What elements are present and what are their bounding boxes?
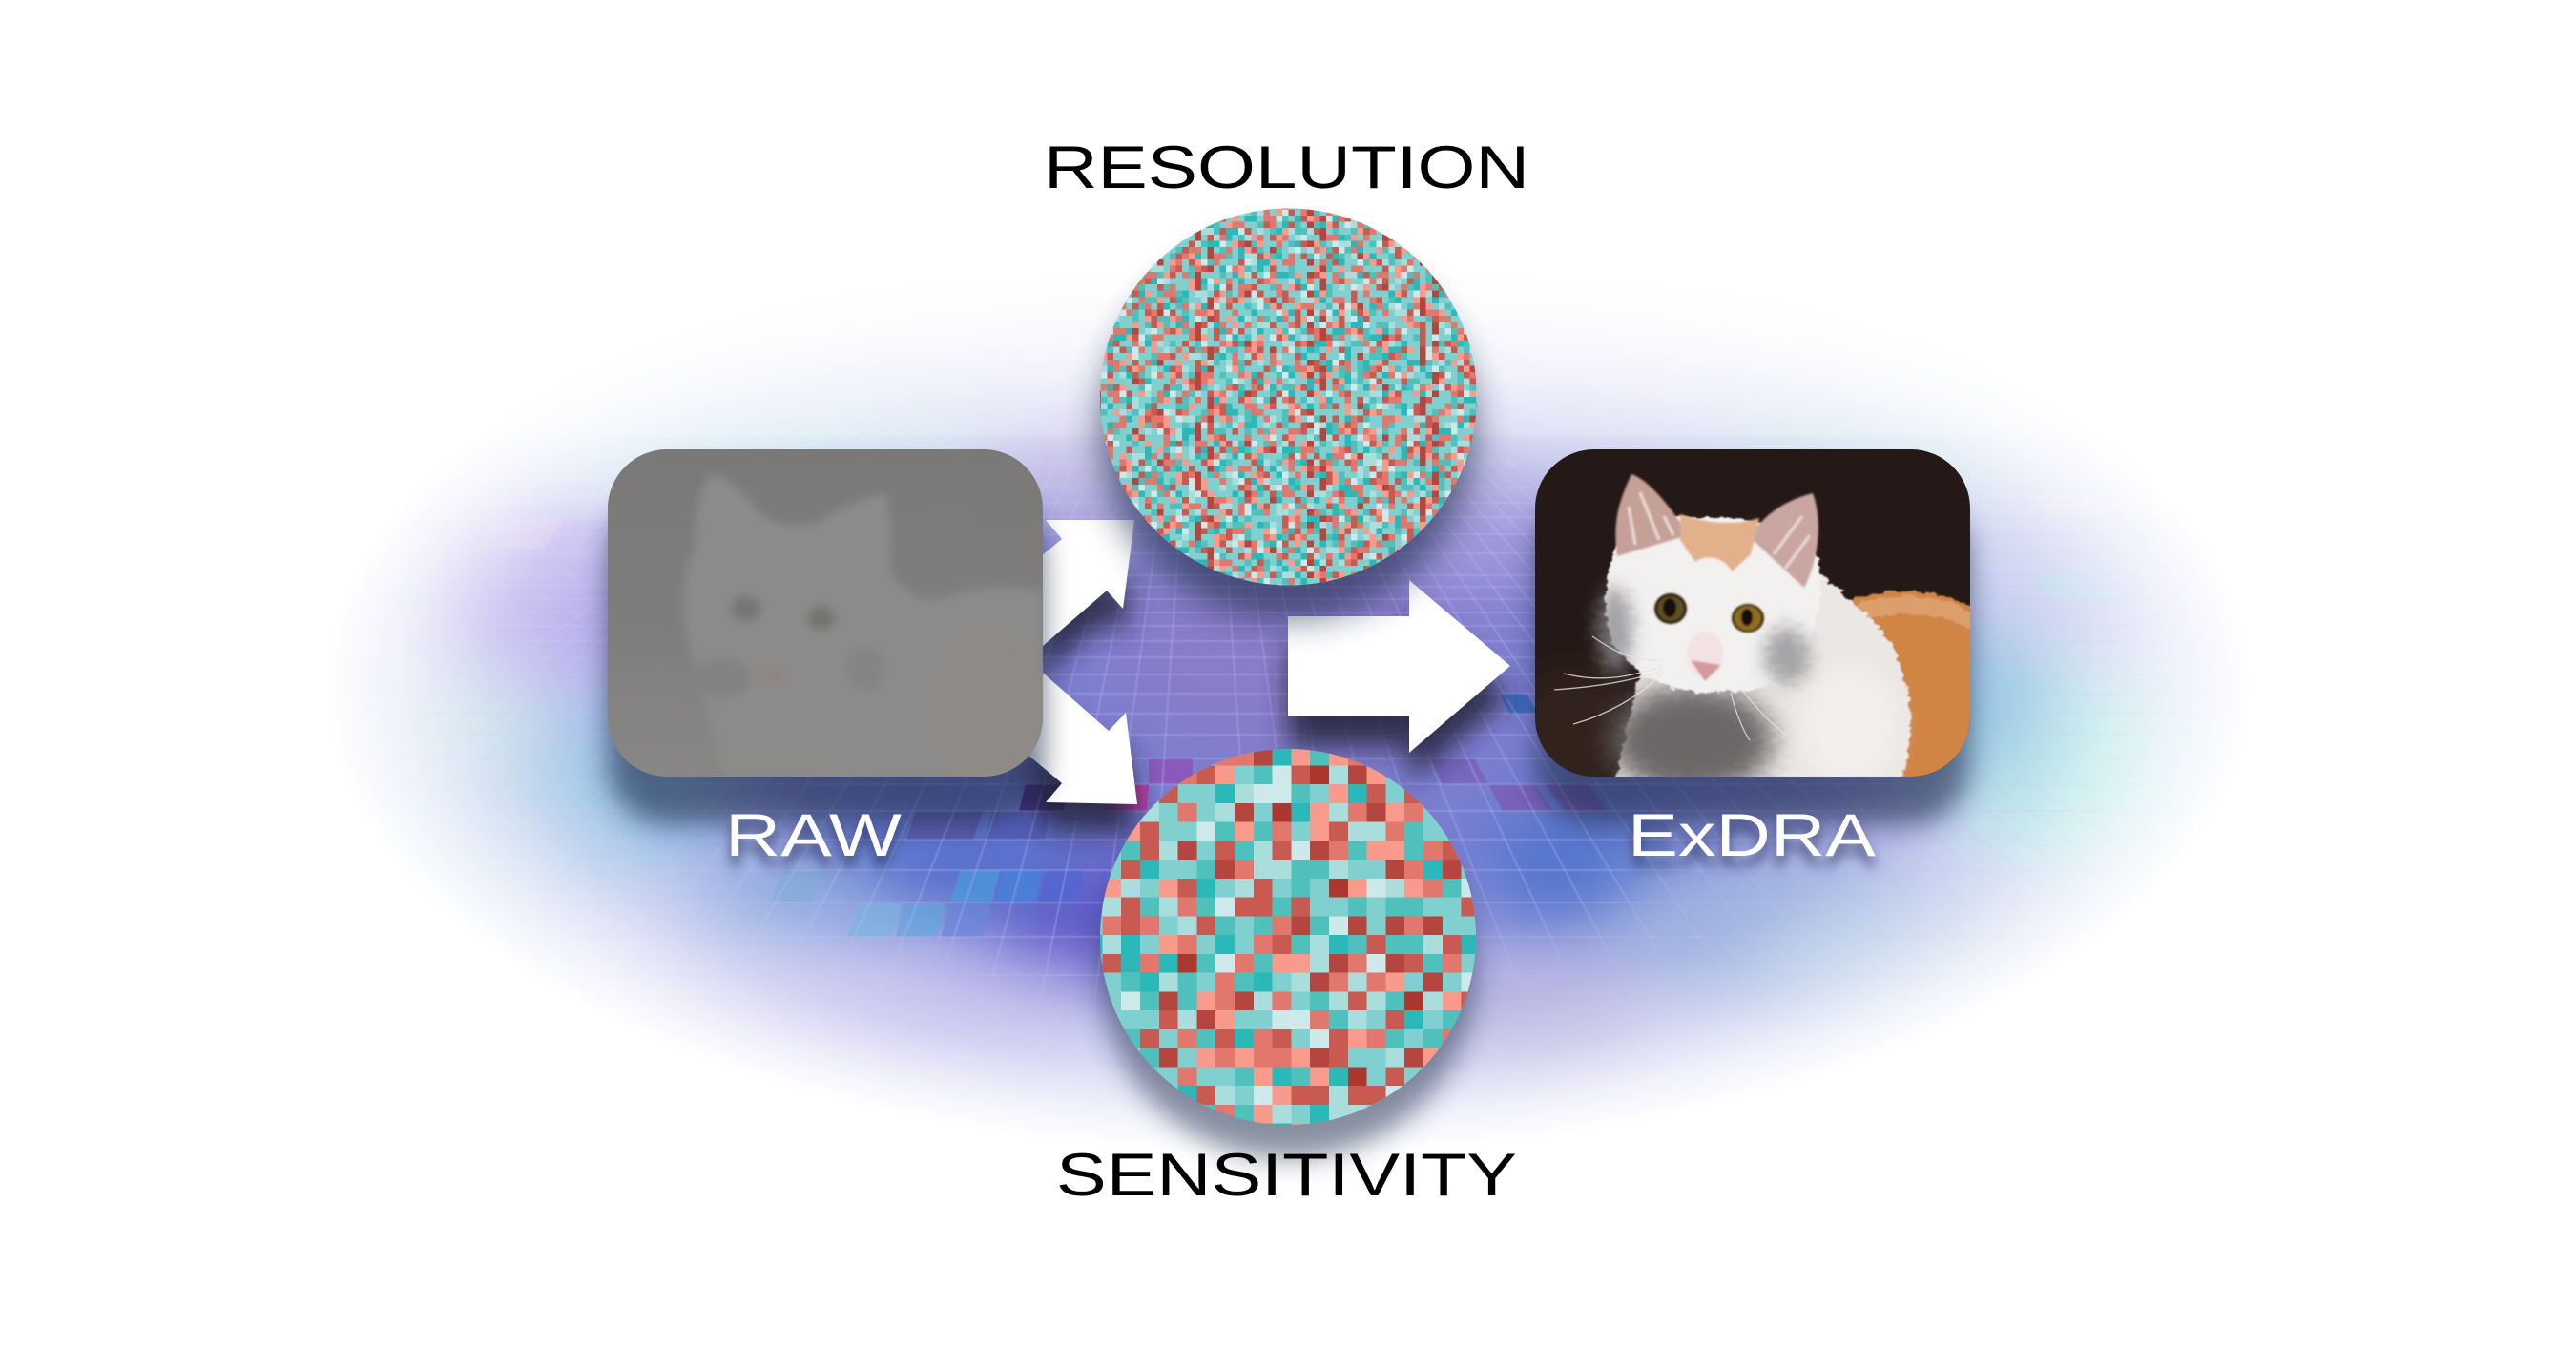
label: ExDRA: ExDRA xyxy=(1628,802,1876,869)
panel: RAW noisy cat image xyxy=(608,449,1047,783)
heading: sensitivity: SENSITIVITY xyxy=(1056,1142,1517,1209)
cat ears xyxy=(1615,474,1688,556)
cat forehead patch xyxy=(1680,514,1759,571)
panel: ExDRA restored cat image xyxy=(1535,449,1970,777)
panel: resolution mosaic circle xyxy=(1100,208,1477,586)
background glow with perspective grid xyxy=(366,344,2212,1130)
label: RAW: RAW xyxy=(725,802,903,869)
arrow: merge to ExDRA xyxy=(1288,580,1510,753)
cat eyes xyxy=(1654,593,1764,633)
cat whiskers xyxy=(1554,636,1802,740)
arrow: raw to resolution xyxy=(1035,520,1134,653)
arrow: raw to sensitivity xyxy=(1021,666,1137,804)
card and circle shadows xyxy=(608,243,1969,1159)
arrow shadows xyxy=(1026,549,1510,833)
heading: resolution: RESOLUTION xyxy=(1044,135,1529,201)
panel: sensitivity mosaic circle xyxy=(1084,746,1481,1133)
grid tiles and lines xyxy=(530,208,2074,1124)
